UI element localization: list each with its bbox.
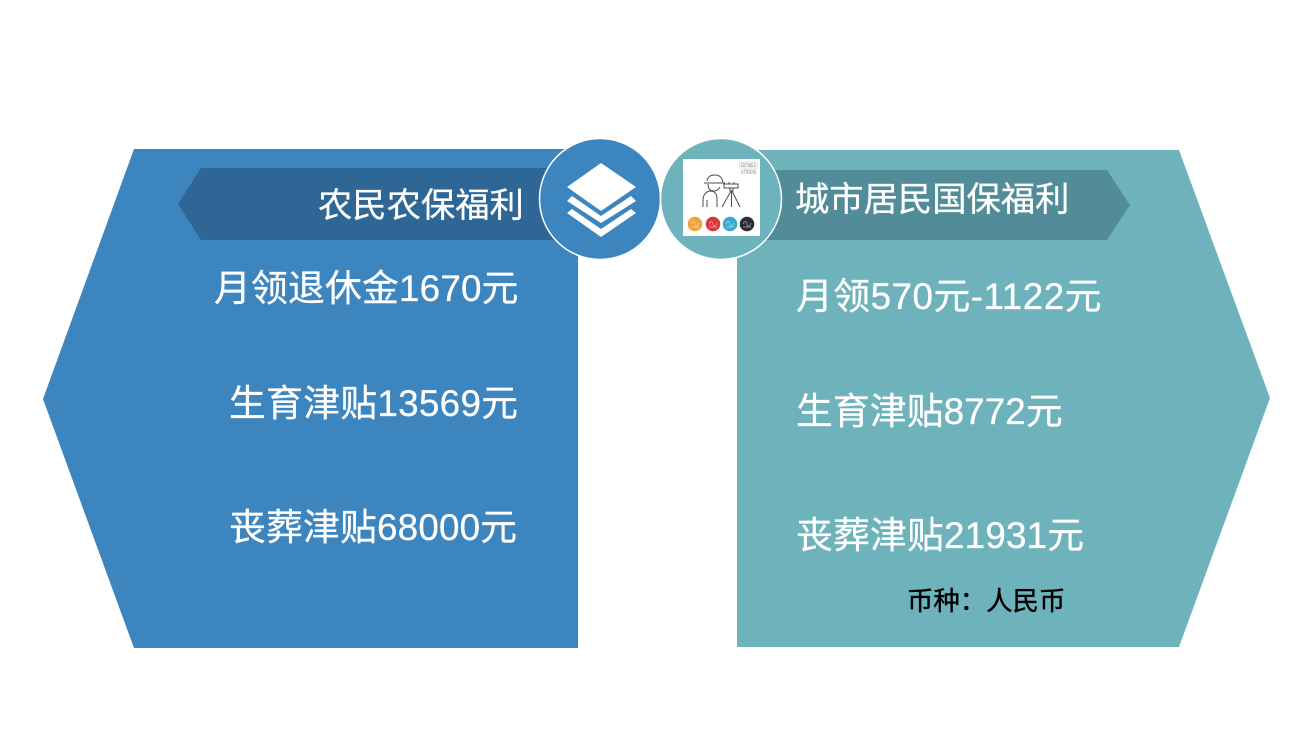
- colour swatches: [688, 217, 754, 231]
- panel background: blue hexagon: [43, 149, 578, 648]
- surveyor figure: [703, 175, 740, 207]
- icon: surveyor in teal circle: [660, 138, 782, 260]
- editable stroke tag: [740, 162, 758, 176]
- panel background: teal hexagon: [737, 150, 1270, 647]
- heading ribbon: urban resident benefits: 城市居民国保福利: [795, 181, 1069, 219]
- text: maternity allowance: 生育津贴8772元: [796, 391, 1063, 432]
- heading ribbon: urban resident benefits: [750, 170, 1130, 240]
- text: monthly pension: 月领退休金1670元: [214, 268, 519, 309]
- panel: urban resident benefits: [737, 150, 1270, 647]
- text: funeral allowance: 丧葬津贴21931元: [796, 515, 1084, 556]
- text: funeral allowance: 丧葬津贴68000元: [229, 507, 517, 548]
- text: maternity allowance: 生育津贴13569元: [229, 383, 518, 424]
- icon card: surveyor with theodolite: [683, 159, 760, 236]
- heading ribbon: farmer benefits: 农民农保福利: [318, 187, 524, 225]
- editable stroke tag: STROKE: [741, 169, 757, 176]
- icon: layers in blue circle: [540, 138, 660, 260]
- panel: farmer benefits: [43, 149, 578, 648]
- editable stroke tag: EDITABLE: [741, 163, 756, 169]
- heading ribbon: farmer benefits: [178, 168, 560, 240]
- text: monthly pension range: 月领570元-1122元: [796, 276, 1102, 317]
- text: currency note: 币种：人民币: [907, 586, 1065, 616]
